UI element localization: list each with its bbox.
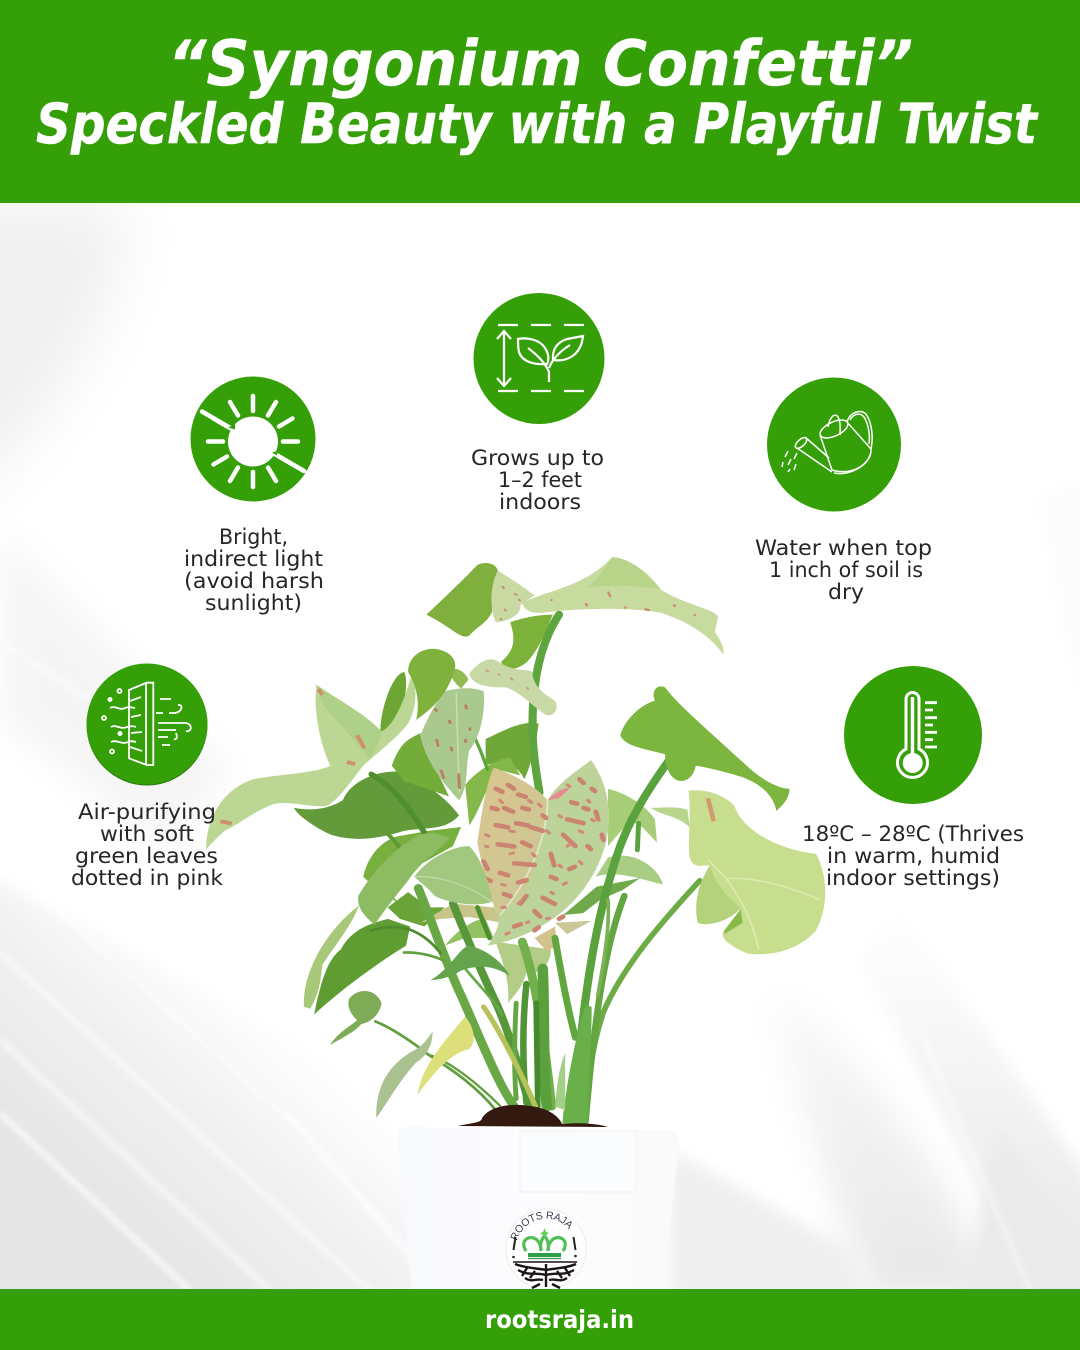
feature: light [184,376,324,616]
pot [397,1105,679,1289]
label: air purifying: green leaves [75,844,218,869]
icon: no direct sun [190,376,316,502]
label: watering [755,536,932,605]
label: light: indirect light [184,547,323,572]
label: temperature: in warm, humid [827,844,1000,869]
label: light: sunlight) [205,591,302,616]
lower right big pale leaf [688,790,825,954]
soil [458,1105,608,1127]
footer url: rootsraja.in [485,1305,634,1334]
icon: watering can [767,378,901,512]
icon: thermometer [844,666,982,804]
lower stalks [562,1005,592,1126]
title line 1: “Syngonium Confetti” [168,27,913,100]
roots raja sticker [506,1208,586,1289]
label: height: Grows up to [471,446,604,471]
label: height [471,446,604,515]
label: watering: Water when top [755,536,932,561]
label: temperature [802,822,1024,891]
feature: watering [755,378,932,605]
label: height: 1–2 feet [498,468,582,493]
plant: syngonium confetti [206,557,825,1126]
icon: plant height [474,293,604,424]
icon: air filter [86,664,208,786]
label: air purifying: Air-purifying [78,800,216,825]
pale speckled upper leaf [420,659,557,800]
feature: air purifying [71,664,224,891]
front green leaves [330,833,510,1118]
label: temperature: indoor settings) [826,866,1000,891]
header banner [0,0,1080,203]
label: air purifying: with soft [100,822,194,847]
label: watering: 1 inch of soil is [769,558,923,583]
top left green leaf [426,563,498,637]
label: light: Bright, [219,525,288,550]
label: light: (avoid harsh [184,569,324,594]
central confetti leaf [477,760,609,946]
top right pale leaf [426,557,724,669]
label: air purifying: dotted in pink [71,866,224,891]
right upright green leaf [620,686,790,811]
sticker roots [513,1262,577,1288]
footer banner [0,1289,1080,1350]
label: air purifying [71,800,224,891]
crown [524,1236,565,1258]
sticker name: ROOTS RAJA [510,1211,572,1240]
pot label patch [520,1131,636,1192]
left big pale leaf [206,649,455,850]
back stems and dark leaves [294,669,690,1015]
label: watering: dry [828,580,864,605]
feature: height [471,293,604,515]
label: light [184,525,324,616]
stems [371,615,700,1122]
feature: temperature [802,666,1024,891]
label: height: indoors [499,490,581,515]
label: temperature: 18ºC – 28ºC (Thrives [802,822,1024,847]
